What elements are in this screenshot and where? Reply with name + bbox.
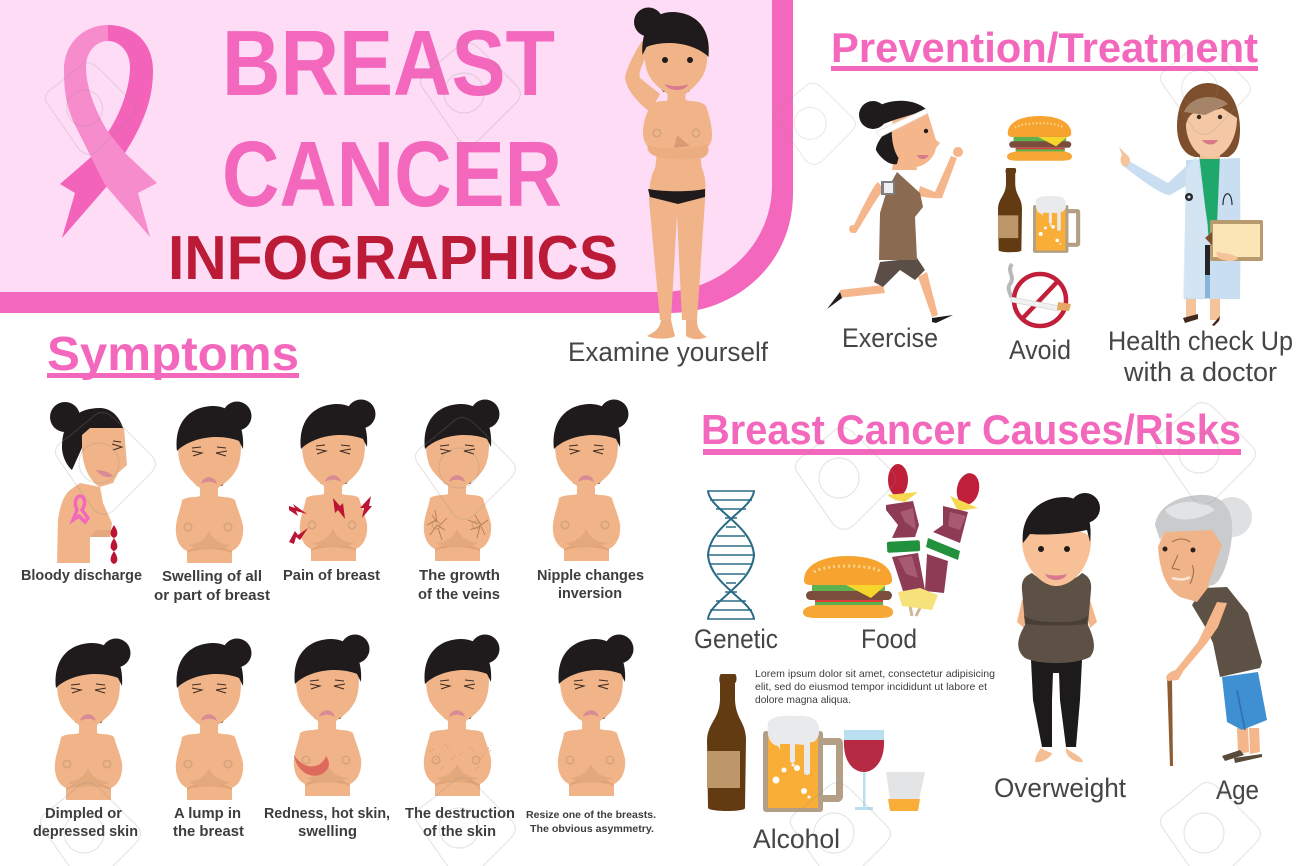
symptom labels: or part of breast [154,588,270,604]
label: overweight: Overweight [994,773,1126,803]
figure: runner exercising [827,101,963,323]
title: BREAST [222,11,555,115]
icon: avoid beer mug [1033,196,1080,253]
symptom labels: The growth [419,568,500,584]
symptom labels: depressed skin [33,824,138,840]
figure: doctor [1119,83,1263,326]
symptom: growth of the veins [424,400,500,561]
symptom labels [21,568,656,840]
symptom: destruction of the skin [424,634,500,796]
label: health check up with a doctor [1108,326,1293,387]
symptom labels: Nipple changes [537,568,644,584]
symptom labels: Resize one of the breasts. [526,809,656,821]
text block: lorem ipsum: elit, sed do eiusmod tempor incididunt ut labore et [755,681,987,693]
heading: symptoms: Symptoms [47,328,299,381]
symptom: a lump [176,638,252,800]
text block: lorem ipsum [755,668,995,706]
label: exercise: Exercise [842,323,938,353]
icon: beer mug [763,716,842,812]
icon: no smoking [1009,264,1071,326]
icon: DNA helix [707,491,755,619]
figure: overweight woman [1017,493,1100,762]
symptom labels: The obvious asymmetry. [530,823,654,835]
label: alcohol: Alcohol [753,824,840,854]
text block: lorem ipsum: dolore magna aliqua. [755,694,851,706]
symptom: asymmetry [558,634,634,796]
header panel [0,0,793,313]
symptom labels: Bloody discharge [21,568,142,584]
label: health check up with a doctor: with a doctor [1123,357,1277,387]
symptom labels: Pain of breast [283,568,380,584]
symptom labels: Dimpled or [45,806,122,822]
symptom labels: swelling [298,824,357,840]
symptom labels: The destruction [405,806,515,822]
figure: elderly woman with cane [1155,495,1267,766]
heading: prevention and treatment: Prevention/Treatment [831,24,1258,71]
symptom labels: of the skin [423,824,496,840]
label: genetic: Genetic [694,624,778,654]
symptom: swelling [176,402,252,563]
heading: causes and risks: Breast Cancer Causes/Risks [701,406,1241,453]
symptom labels: Redness, hot skin, [264,806,390,822]
icon: avoid beer bottle [998,168,1022,252]
icon: wine glass [844,730,884,810]
icon: pink ribbon [60,25,157,238]
text block: lorem ipsum: Lorem ipsum dolor sit amet, consectetur adipisicing [755,668,995,680]
title [168,11,618,293]
label: age: Age [1216,775,1259,805]
icon: meat skewers [886,464,982,616]
symptom labels: of the veins [418,587,500,603]
figure: woman examining herself [625,8,712,339]
symptom: dimpled skin [55,638,130,800]
label: examine yourself: Examine yourself [568,337,768,367]
label: avoid: Avoid [1009,335,1071,365]
title: CANCER [222,122,562,226]
symptom labels: Swelling of all [162,569,262,585]
icon: beer bottle [707,674,746,811]
symptom: redness [294,634,370,796]
icon: burger [803,556,893,618]
symptom: pain of breast [289,400,376,561]
title: INFOGRAPHICS [168,224,618,293]
label: food: Food [861,624,917,654]
icon: avoid burger [1007,116,1072,161]
symptom labels: A lump in [174,806,241,822]
symptom: nipple changes inversion [553,400,628,561]
symptom: bloody discharge [50,402,127,564]
symptom labels: inversion [558,586,622,602]
symptom labels: the breast [173,824,244,840]
icon: whisky glass [886,772,925,811]
